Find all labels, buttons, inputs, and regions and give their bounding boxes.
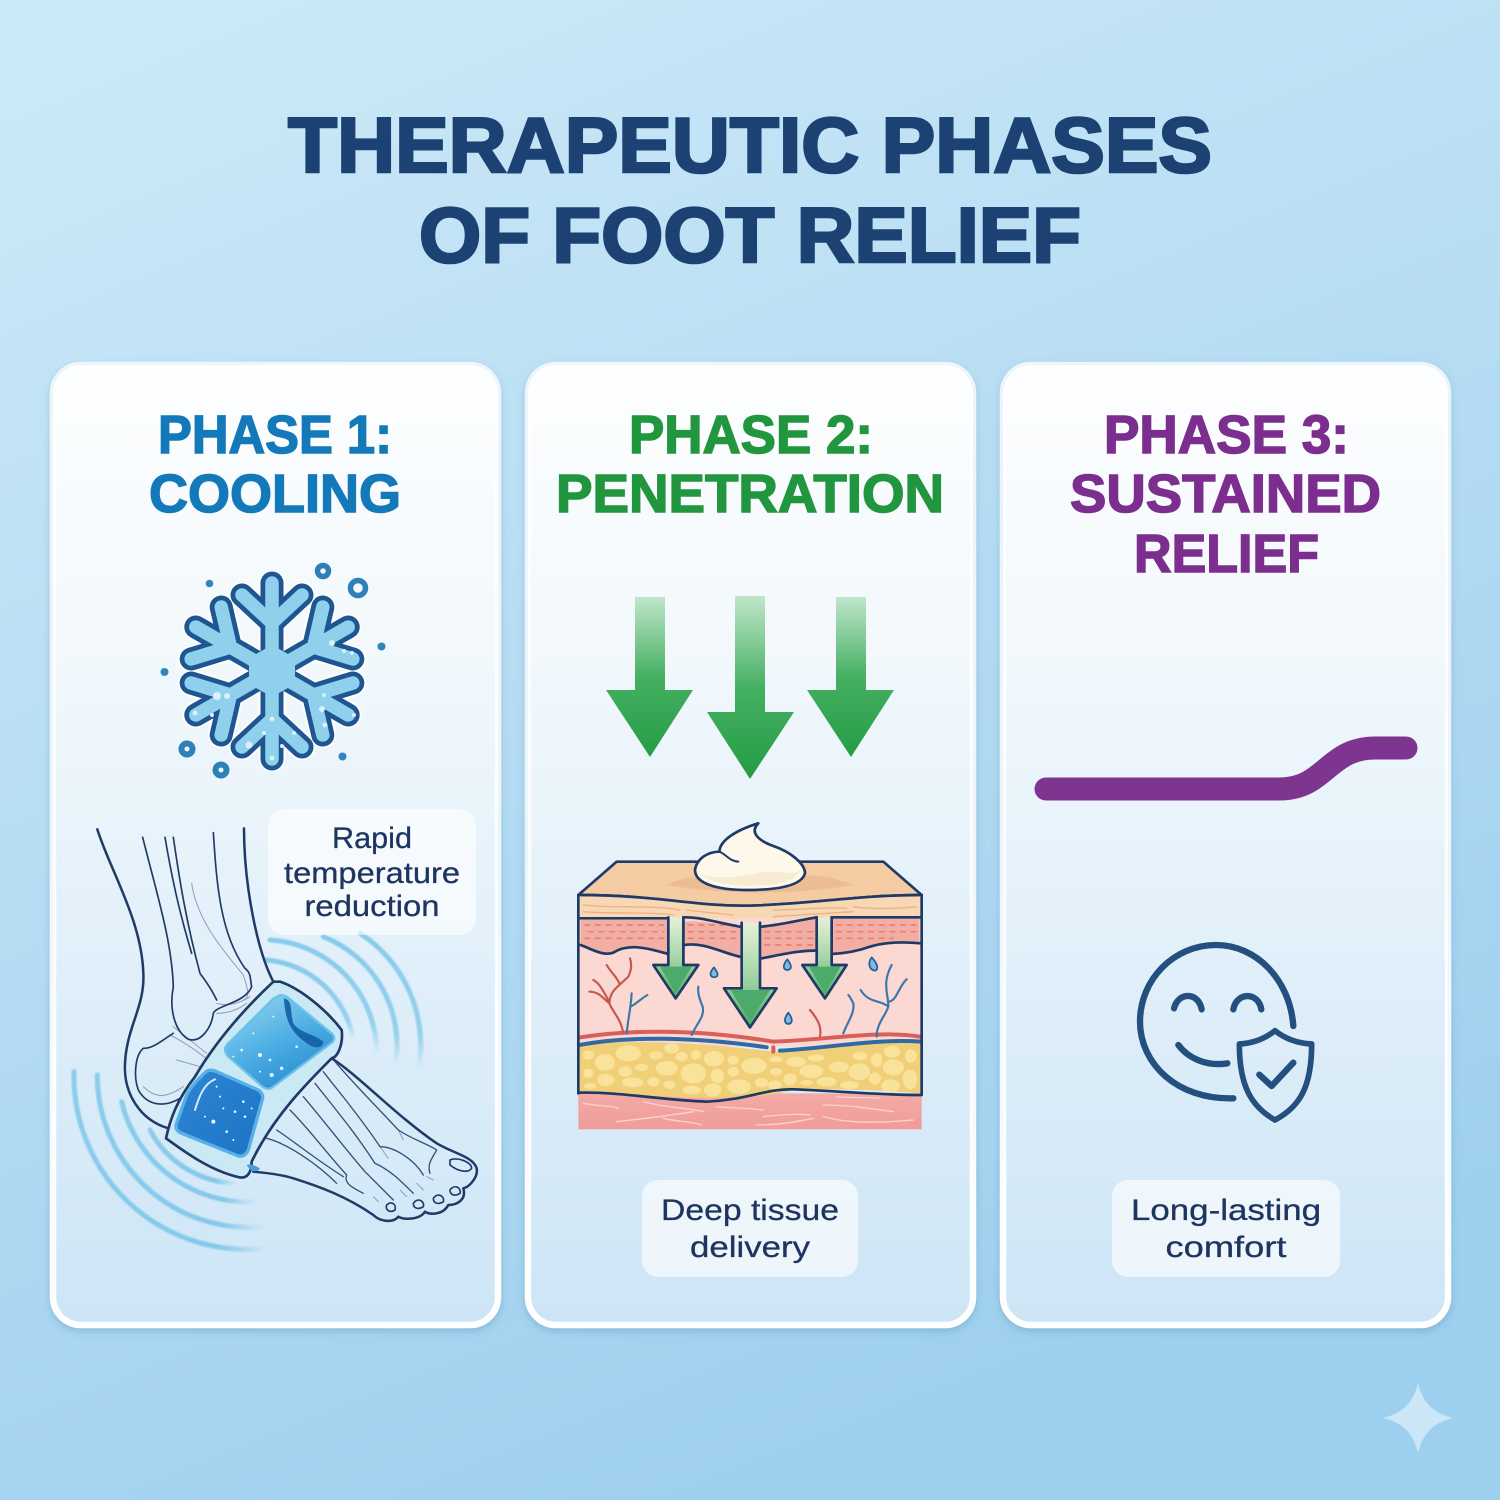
phase 2 heading: PHASE 2: bbox=[629, 405, 873, 465]
phase 1 heading: PHASE 1: bbox=[158, 405, 392, 465]
panel: phase 2 penetration bbox=[528, 365, 973, 1325]
gel wrap bbox=[166, 982, 342, 1178]
phase 3 heading: PHASE 3: bbox=[1104, 405, 1349, 465]
fat layer bbox=[578, 1042, 922, 1098]
blood vessels bbox=[579, 958, 921, 1052]
panel: phase 1 cooling bbox=[53, 365, 498, 1325]
droplets bbox=[710, 957, 877, 1024]
fat bottom edge bbox=[578, 1089, 922, 1102]
caption: deep tissue delivery: Deep tissue bbox=[661, 1194, 839, 1227]
caption: rapid temperature reduction: reduction bbox=[304, 890, 440, 923]
caption: deep tissue delivery: delivery bbox=[690, 1231, 810, 1264]
cooling waves bbox=[74, 933, 421, 1249]
dermis layer outlines bbox=[578, 895, 922, 1093]
skeleton detail lines bbox=[143, 883, 433, 1202]
gel pack upper bbox=[225, 995, 334, 1089]
title bbox=[288, 101, 1212, 279]
title: THERAPEUTIC PHASES bbox=[288, 101, 1212, 189]
phase 2 heading bbox=[556, 405, 944, 524]
icon: snow particles bbox=[160, 566, 386, 776]
phase 1 heading: COOLING bbox=[149, 464, 401, 524]
caption: long-lasting comfort: comfort bbox=[1166, 1231, 1287, 1264]
inner green arrows bbox=[653, 917, 847, 1027]
caption: rapid temperature reduction: Rapid bbox=[332, 822, 412, 855]
icon: sparkle bbox=[1383, 1383, 1453, 1453]
panel: phase 3 sustained relief bbox=[1003, 365, 1448, 1325]
top epidermis bbox=[578, 862, 922, 906]
icon: three down arrows bbox=[606, 596, 894, 779]
icon: snowflake bbox=[181, 583, 363, 760]
caption: deep tissue delivery bbox=[642, 1180, 858, 1277]
caption: rapid temperature reduction: temperature bbox=[284, 857, 460, 890]
red dermis band bbox=[581, 918, 919, 958]
foot bones bbox=[267, 1062, 437, 1200]
phase 2 heading: PENETRATION bbox=[556, 464, 944, 524]
chart: sustained relief curve bbox=[1046, 748, 1406, 789]
phase 3 heading: RELIEF bbox=[1134, 524, 1319, 584]
phase 3 heading bbox=[1070, 405, 1381, 584]
caption: long-lasting comfort: Long-lasting bbox=[1131, 1194, 1321, 1227]
illustration: skin cross-section bbox=[578, 823, 922, 1129]
title: OF FOOT RELIEF bbox=[419, 191, 1081, 279]
phase 3 heading: SUSTAINED bbox=[1070, 464, 1381, 524]
caption: long-lasting comfort bbox=[1112, 1180, 1340, 1277]
cream dollop bbox=[695, 823, 805, 890]
phase 1 heading bbox=[149, 405, 401, 524]
bones and leg outline bbox=[97, 828, 477, 1221]
fat cells bbox=[583, 1043, 917, 1097]
dermis bbox=[579, 918, 921, 1047]
gel pack lower bbox=[176, 1070, 263, 1156]
icon: smiley with shield bbox=[1140, 945, 1312, 1120]
caption: rapid temperature reduction bbox=[268, 809, 476, 935]
bottom muscle layer bbox=[578, 1093, 922, 1129]
illustration: foot with gel wrap bbox=[74, 828, 477, 1249]
